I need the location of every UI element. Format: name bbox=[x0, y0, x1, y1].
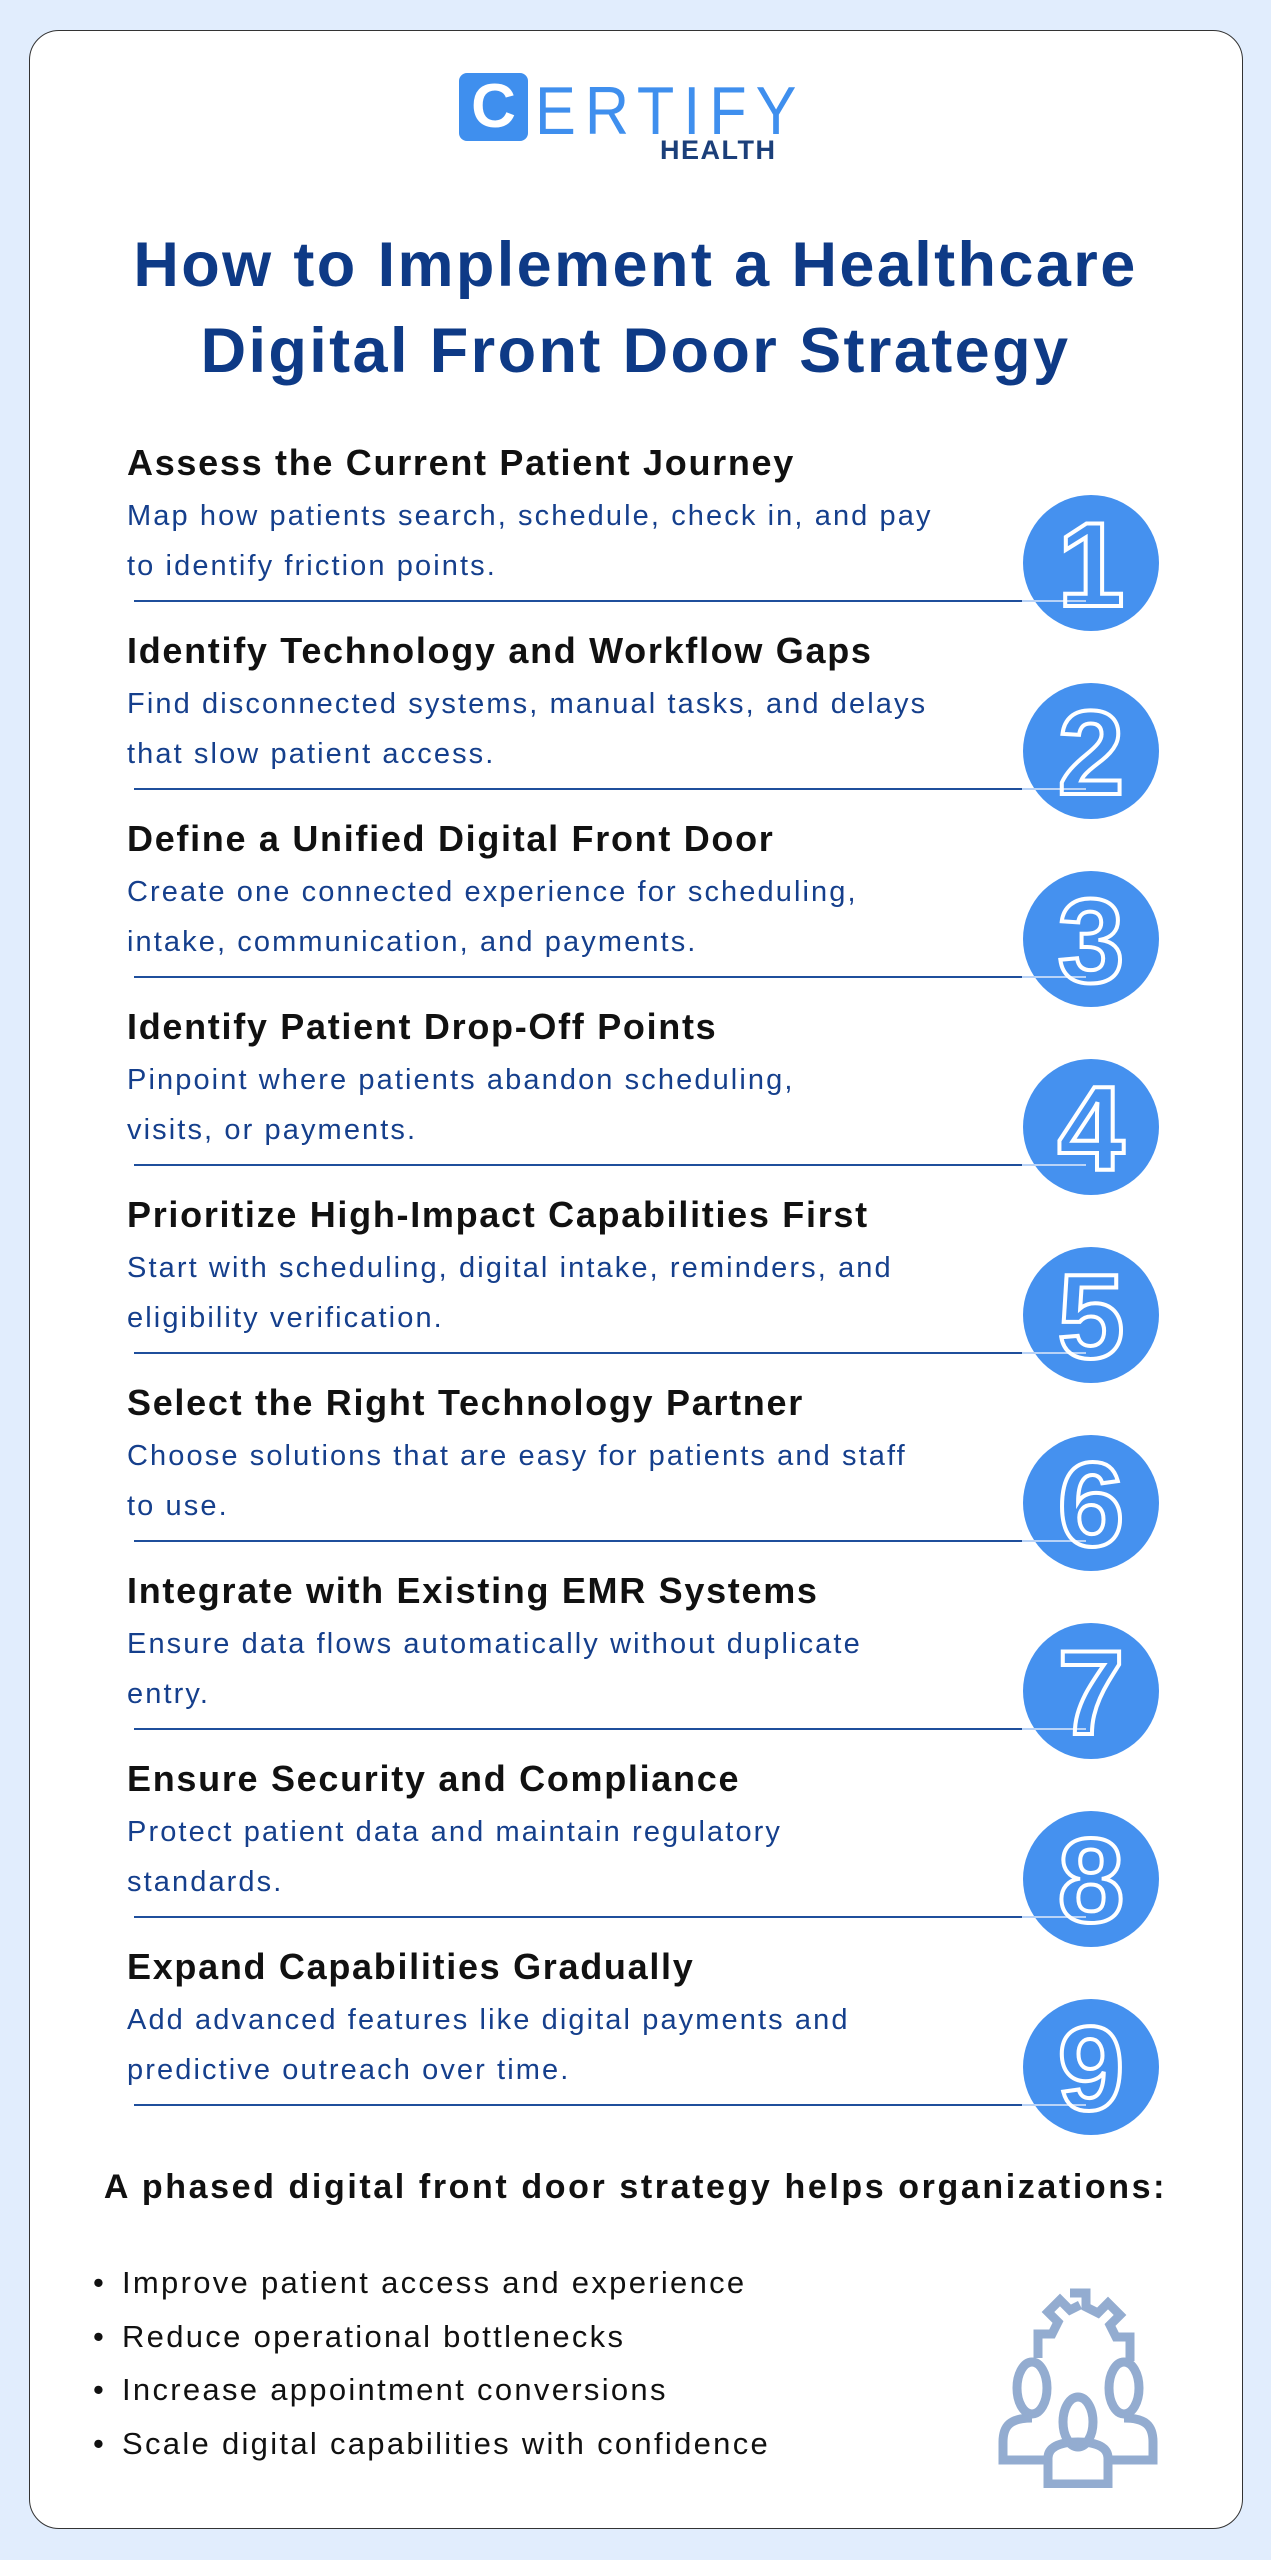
step 2: Find disconnected systems, manual tasks, and delays bbox=[127, 688, 927, 720]
step 2: that slow patient access. bbox=[127, 738, 495, 770]
step 1: 1 bbox=[1058, 498, 1124, 632]
step 9: 9 bbox=[1058, 2002, 1124, 2136]
step 8: Protect patient data and maintain regulatory bbox=[127, 1816, 782, 1848]
step 7: Integrate with Existing EMR Systems bbox=[127, 1570, 819, 1611]
step 5: Start with scheduling, digital intake, reminders, and bbox=[127, 1252, 893, 1284]
step 5: Prioritize High-Impact Capabilities First bbox=[127, 1194, 869, 1235]
logo subtitle: HEALTH bbox=[660, 135, 776, 165]
step 4: visits, or payments. bbox=[127, 1114, 417, 1146]
benefits list: Reduce operational bottlenecks bbox=[122, 2318, 625, 2354]
step 4: Identify Patient Drop-Off Points bbox=[127, 1006, 717, 1047]
logo wordmark: ERTIFY bbox=[535, 73, 806, 149]
step 1: Assess the Current Patient Journey bbox=[127, 442, 795, 483]
step 9: predictive outreach over time. bbox=[127, 2054, 570, 2086]
benefits list: • bbox=[93, 2372, 104, 2407]
benefits list: Scale digital capabilities with confidence bbox=[122, 2426, 770, 2460]
step 7: Ensure data flows automatically without duplicate bbox=[127, 1628, 862, 1660]
title bbox=[133, 230, 1138, 386]
step 8: standards. bbox=[127, 1866, 283, 1898]
benefits list: Increase appointment conversions bbox=[122, 2372, 668, 2407]
benefits list: • bbox=[93, 2265, 104, 2300]
step 7 bbox=[127, 1570, 1159, 1760]
logo mark: C box: C bbox=[471, 72, 516, 141]
step 7: 7 bbox=[1058, 1626, 1124, 1760]
step 3 bbox=[127, 818, 1159, 1008]
step 6: Choose solutions that are easy for patients and staff bbox=[127, 1440, 907, 1472]
step 3: Define a Unified Digital Front Door bbox=[127, 818, 775, 859]
summary heading: A phased digital front door strategy helps organizations: bbox=[104, 2168, 1167, 2206]
step 3: 3 bbox=[1058, 874, 1124, 1008]
step 8: Ensure Security and Compliance bbox=[127, 1758, 740, 1799]
step 6: 6 bbox=[1058, 1438, 1124, 1572]
step 1: Map how patients search, schedule, check in, and pay bbox=[127, 500, 933, 532]
step 7: entry. bbox=[127, 1678, 210, 1710]
step 1 bbox=[127, 442, 1159, 632]
logo mark: C box bbox=[459, 73, 528, 141]
step 2 bbox=[127, 630, 1159, 820]
title: How to Implement a Healthcare bbox=[133, 230, 1138, 300]
logo bbox=[459, 72, 806, 165]
step 9: Add advanced features like digital payments and bbox=[127, 2004, 850, 2036]
benefits list: • bbox=[93, 2318, 104, 2354]
benefits list: Improve patient access and experience bbox=[122, 2265, 746, 2300]
step 5: 5 bbox=[1058, 1250, 1124, 1384]
step 9 bbox=[127, 1946, 1159, 2136]
step 2: 2 bbox=[1058, 686, 1124, 820]
step 4: 4 bbox=[1058, 1062, 1125, 1196]
title: Digital Front Door Strategy bbox=[201, 316, 1070, 386]
step 1: to identify friction points. bbox=[127, 550, 497, 582]
icon: team with gear bbox=[998, 2288, 1158, 2488]
step 3: Create one connected experience for scheduling, bbox=[127, 876, 858, 908]
step 8 bbox=[127, 1758, 1159, 1948]
step 2: Identify Technology and Workflow Gaps bbox=[127, 630, 873, 671]
step 5: eligibility verification. bbox=[127, 1302, 444, 1334]
step 6: Select the Right Technology Partner bbox=[127, 1382, 804, 1423]
step 3: intake, communication, and payments. bbox=[127, 926, 697, 958]
benefits list: • bbox=[93, 2426, 104, 2460]
step 4 bbox=[127, 1006, 1159, 1196]
step 5 bbox=[127, 1194, 1159, 1384]
step 8: 8 bbox=[1058, 1814, 1124, 1948]
step 6: to use. bbox=[127, 1490, 229, 1522]
benefits list bbox=[93, 2265, 770, 2460]
step 9: Expand Capabilities Gradually bbox=[127, 1946, 694, 1987]
step 6 bbox=[127, 1382, 1159, 1572]
step 4: Pinpoint where patients abandon scheduling, bbox=[127, 1064, 794, 1096]
